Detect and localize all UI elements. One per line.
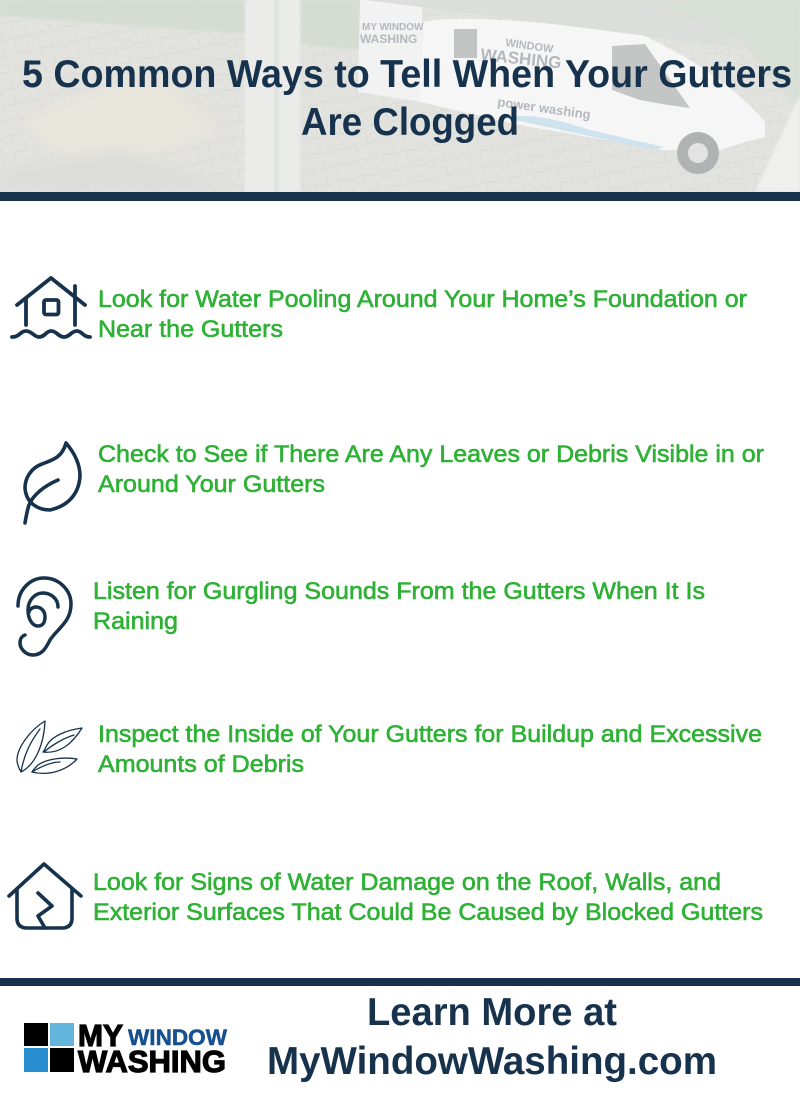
text: gutter buildup: Inspect the Inside of Your Gutters for Buildup and Excessive	[98, 721, 762, 748]
van: WINDOW	[505, 37, 555, 56]
title: 5 Common Ways to Tell When Your Gutters	[22, 53, 792, 96]
item 5: water damage	[9, 864, 763, 928]
item 4: gutter buildup	[17, 721, 762, 778]
text: water pooling: Near the Gutters	[98, 316, 283, 343]
text: water pooling	[98, 286, 747, 343]
text: gurgling sounds: Raining	[93, 608, 178, 635]
van: WASHING	[480, 45, 562, 72]
van	[358, 0, 765, 174]
icon: ear	[18, 578, 71, 655]
text: gutter buildup: Amounts of Debris	[98, 751, 304, 778]
title	[22, 53, 792, 144]
title: Are Clogged	[301, 101, 519, 144]
header background photo	[0, 0, 800, 192]
text: leaves and debris: Around Your Gutters	[98, 471, 325, 498]
footer call to action: MyWindowWashing.com	[267, 1040, 717, 1083]
item 3: gurgling sounds	[18, 578, 705, 655]
text: leaves and debris	[98, 441, 764, 498]
text: gutter buildup	[98, 721, 762, 778]
van: WASHING	[360, 32, 417, 46]
van: power washing	[497, 94, 592, 122]
text: water pooling: Look for Water Pooling Around Your Home’s Foundation or	[98, 286, 747, 313]
header divider bar	[0, 192, 800, 201]
text: gurgling sounds	[93, 578, 705, 635]
item 2: leaves and debris	[25, 441, 764, 523]
footer call to action: Learn More at	[367, 991, 617, 1034]
logo: My Window Washing: WASHING	[78, 1044, 226, 1079]
item 1: water pooling	[12, 278, 747, 343]
icon: cracked house	[9, 864, 81, 928]
logo: My Window Washing	[24, 1018, 227, 1079]
text: leaves and debris: Check to See if There Are Any Leaves or Debris Visible in or	[98, 441, 764, 468]
text: water damage: Exterior Surfaces That Could Be Caused by Blocked Gutters	[93, 899, 763, 926]
text: gurgling sounds: Listen for Gurgling Sounds From the Gutters When It Is	[93, 578, 705, 605]
text: water damage	[93, 869, 763, 926]
van: MY WINDOW	[362, 22, 424, 33]
icon: flooded house	[12, 278, 90, 337]
footer call to action	[267, 991, 717, 1083]
icon: three leaves	[17, 721, 82, 773]
logo: My Window Washing: MY	[78, 1018, 123, 1053]
footer divider bar	[0, 978, 800, 986]
logo: My Window Washing: WINDOW	[128, 1025, 227, 1050]
icon: leaf	[25, 443, 80, 523]
text: water damage: Look for Signs of Water Damage on the Roof, Walls, and	[93, 869, 721, 896]
